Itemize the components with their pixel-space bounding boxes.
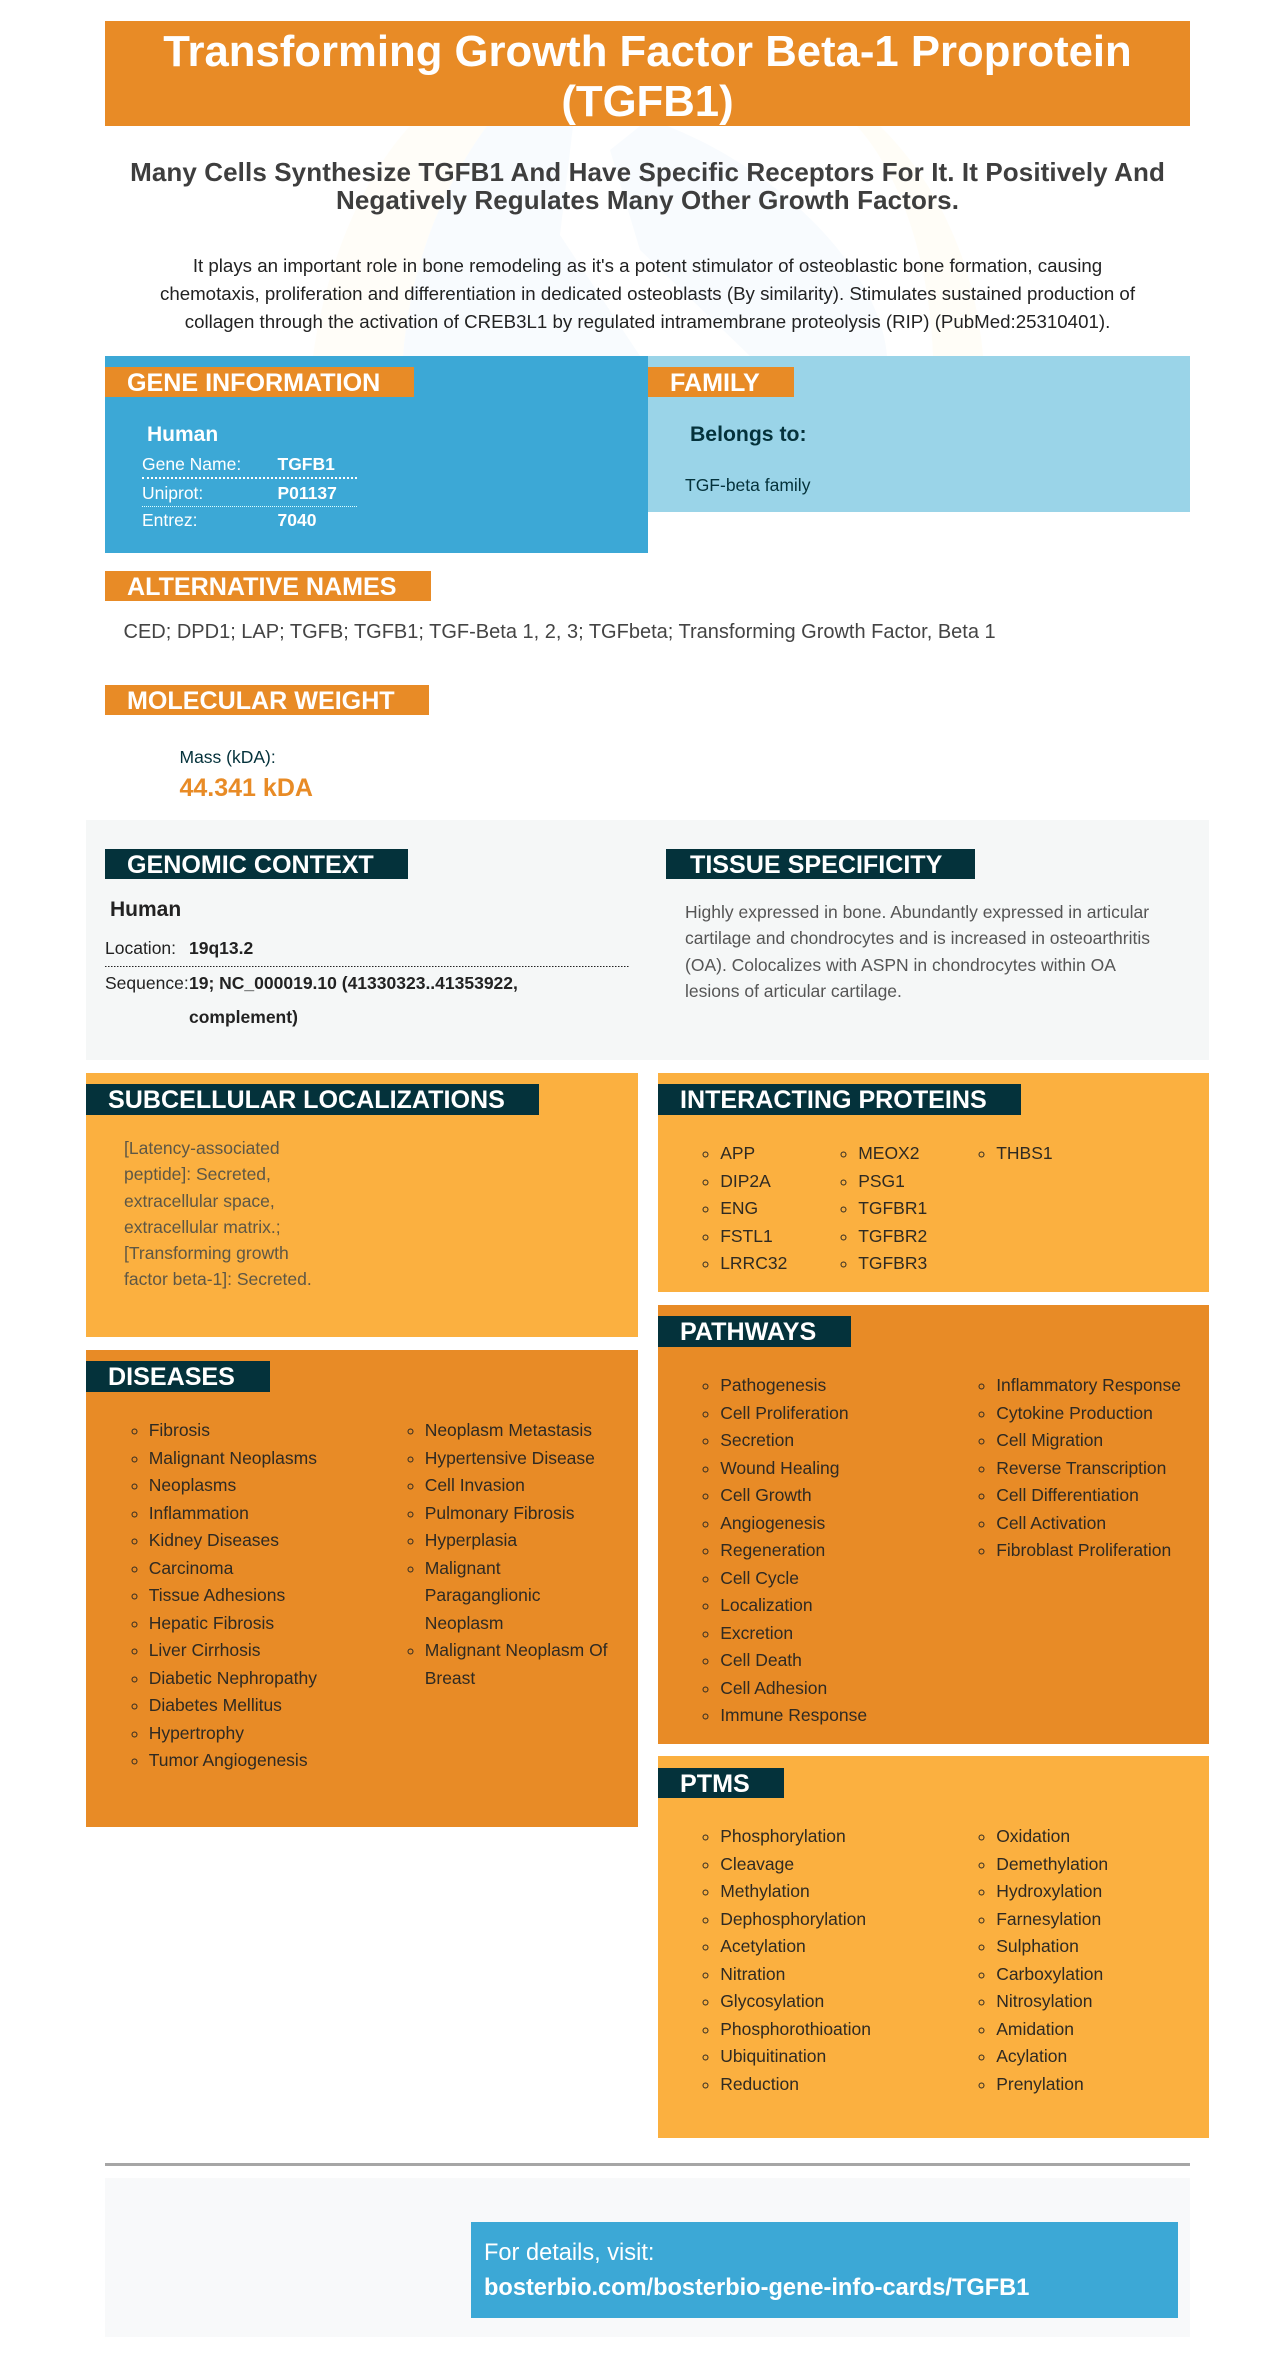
PTM list column 2: Nitrosylation bbox=[996, 1991, 1092, 2011]
uniprot row: P01137 bbox=[278, 483, 337, 503]
disease list column 1 bbox=[132, 1420, 317, 1770]
pathway list column 2: Fibroblast Proliferation bbox=[996, 1540, 1171, 1560]
heading: family bbox=[648, 367, 794, 397]
disease list column 1: Liver Cirrhosis bbox=[149, 1640, 261, 1660]
panel: pathways bbox=[658, 1305, 1209, 1744]
heading: pathways bbox=[658, 1316, 851, 1347]
pathway list column 1: Cell Proliferation bbox=[720, 1402, 849, 1422]
tissue specificity text: (OA). Colocalizes with ASPN in chondrocytes within OA bbox=[685, 955, 1116, 975]
disease list column 2: Malignant Neoplasm Of Breast bbox=[425, 1640, 608, 1688]
disease list column 1: Kidney Diseases bbox=[149, 1530, 279, 1550]
protein list column 1: FSTL1 bbox=[720, 1226, 773, 1246]
pathway list column 1: Angiogenesis bbox=[720, 1512, 825, 1532]
heading: PTMs: PTMS bbox=[680, 1770, 750, 1798]
subcellular text: extracellular space, bbox=[124, 1191, 275, 1211]
tissue specificity text: cartilage and chondrocytes and is increased in osteoarthritis bbox=[685, 928, 1150, 948]
protein list column 1: APP bbox=[720, 1143, 755, 1163]
subcellular text: [Transforming growth bbox=[124, 1243, 289, 1263]
heading: genomic context: GENOMIC CONTEXT bbox=[127, 851, 374, 879]
PTM list column 2: Acylation bbox=[996, 2046, 1067, 2066]
pathway list column 2: Cell Differentiation bbox=[996, 1485, 1139, 1505]
tissue specificity text bbox=[685, 902, 1150, 1001]
PTM list column 1 bbox=[702, 1826, 871, 2094]
mass value: 44.341 kDA bbox=[180, 774, 313, 802]
pathway list column 2: Inflammatory Response bbox=[996, 1375, 1181, 1395]
uniprot row: Uniprot: bbox=[142, 483, 203, 503]
protein list column 2: MEOX2 bbox=[858, 1143, 919, 1163]
species label: Human bbox=[147, 423, 218, 446]
PTM list column 2: Demethylation bbox=[996, 1854, 1108, 1874]
subcellular text: peptide]: Secreted, bbox=[124, 1164, 271, 1184]
disease list column 1: Hepatic Fibrosis bbox=[149, 1612, 274, 1632]
disease list column 1: Neoplasms bbox=[149, 1475, 236, 1495]
subtitle: Negatively Regulates Many Other Growth Factors. bbox=[336, 185, 959, 215]
pathway list column 1: Cell Death bbox=[720, 1650, 802, 1670]
pathway list column 1: Wound Healing bbox=[720, 1458, 840, 1478]
entrez row: 7040 bbox=[278, 510, 316, 530]
subtitle: Many Cells Synthesize TGFB1 And Have Specific Receptors For It. It Positively And bbox=[130, 157, 1165, 187]
disease list column 1: Tumor Angiogenesis bbox=[149, 1750, 308, 1770]
panel: footer bbox=[105, 2178, 1190, 2337]
belongs to label: Belongs to: bbox=[690, 423, 807, 446]
pathway list column 2: Reverse Transcription bbox=[996, 1458, 1166, 1478]
disease list column 1: Fibrosis bbox=[149, 1420, 210, 1440]
heading: subcellular localizations: SUBCELLULAR LOCALIZATIONS bbox=[108, 1086, 505, 1114]
panel: family bbox=[648, 356, 1190, 512]
panel: interacting proteins bbox=[658, 1073, 1209, 1292]
disease list column 1: Hypertrophy bbox=[149, 1722, 244, 1742]
disease list column 1: Carcinoma bbox=[149, 1558, 233, 1578]
pathway list column 1: Cell Adhesion bbox=[720, 1678, 827, 1698]
pathway list column 1: Localization bbox=[720, 1595, 813, 1615]
pathway list column 1: Immune Response bbox=[720, 1705, 867, 1725]
description paragraph: chemotaxis, proliferation and differentiation in dedicated osteoblasts (By similarity). Stimulates sustained production of bbox=[160, 283, 1135, 304]
PTM list column 2: Amidation bbox=[996, 2018, 1074, 2038]
pathway list column 2: Cell Activation bbox=[996, 1512, 1106, 1532]
panel: subcellular localizations bbox=[86, 1073, 638, 1337]
sequence row bbox=[105, 973, 518, 1027]
disease list column 2 bbox=[408, 1420, 608, 1688]
tissue specificity text: Highly expressed in bone. Abundantly expressed in articular bbox=[685, 902, 1149, 922]
sequence row: 19; NC_000019.10 (41330323..41353922, bbox=[189, 973, 518, 993]
disease list column 1: Tissue Adhesions bbox=[149, 1585, 285, 1605]
protein list column 3: THBS1 bbox=[996, 1143, 1053, 1163]
PTM list column 2: Farnesylation bbox=[996, 1908, 1101, 1928]
PTM list column 1: Phosphorylation bbox=[720, 1826, 846, 1846]
disease list column 1: Diabetic Nephropathy bbox=[149, 1668, 317, 1688]
disease list column 1: Inflammation bbox=[149, 1502, 249, 1522]
heading: PTMs bbox=[658, 1768, 784, 1798]
PTM list column 1: Reduction bbox=[720, 2074, 799, 2094]
subcellular text: factor beta-1]: Secreted. bbox=[124, 1269, 312, 1289]
pathway list column 2 bbox=[978, 1375, 1181, 1560]
PTM list column 1: Phosphorothioation bbox=[720, 2018, 871, 2038]
gene name row: TGFB1 bbox=[278, 454, 335, 474]
callout label: For details, visit: bbox=[484, 2240, 654, 2266]
description paragraph bbox=[160, 255, 1136, 332]
protein list column 2: TGFBR2 bbox=[858, 1226, 927, 1246]
subcellular text: extracellular matrix.; bbox=[124, 1217, 281, 1237]
subcellular text: [Latency-associated bbox=[124, 1138, 280, 1158]
disease list column 2: Hyperplasia bbox=[425, 1530, 517, 1550]
panel: genomic context and tissue specificity bbox=[86, 820, 1209, 1060]
PTM list column 1: Methylation bbox=[720, 1881, 810, 1901]
background watermark bbox=[300, 126, 1000, 356]
location row: Location: bbox=[105, 938, 176, 958]
protein list column 2: TGFBR3 bbox=[858, 1253, 927, 1273]
title banner bbox=[105, 21, 1190, 126]
location row: 19q13.2 bbox=[189, 938, 253, 958]
protein list column 1: LRRC32 bbox=[720, 1253, 787, 1273]
pathway list column 1: Cell Growth bbox=[720, 1485, 812, 1505]
entrez row: Entrez: bbox=[142, 510, 197, 530]
family value: TGF-beta family bbox=[685, 474, 810, 494]
disease list column 1: Malignant Neoplasms bbox=[149, 1448, 317, 1468]
pathway list column 1: Cell Cycle bbox=[720, 1568, 799, 1588]
pathway list column 1: Pathogenesis bbox=[720, 1375, 826, 1395]
heading: diseases: DISEASES bbox=[108, 1363, 235, 1391]
protein list column 2: PSG1 bbox=[858, 1170, 905, 1190]
protein list column 2: TGFBR1 bbox=[858, 1198, 927, 1218]
PTM list column 1: Dephosphorylation bbox=[720, 1908, 866, 1928]
uniprot row bbox=[142, 483, 357, 507]
title banner: Transforming Growth Factor Beta-1 Proprotein bbox=[163, 27, 1132, 76]
panel: diseases bbox=[86, 1350, 638, 1827]
heading: alternative names: ALTERNATIVE NAMES bbox=[127, 573, 397, 601]
pathway list column 1 bbox=[702, 1375, 867, 1725]
pathway list column 1: Regeneration bbox=[720, 1540, 825, 1560]
gene name row: Gene Name: bbox=[142, 454, 241, 474]
heading: family: FAMILY bbox=[670, 369, 760, 397]
tissue specificity text: lesions of articular cartilage. bbox=[685, 981, 902, 1001]
mass label: Mass (kDA): bbox=[180, 747, 276, 767]
protein list column 2 bbox=[840, 1143, 927, 1273]
PTM list column 2: Prenylation bbox=[996, 2074, 1084, 2094]
description paragraph: collagen through the activation of CREB3L1 by regulated intramembrane proteolysis (RIP) (PubMed:25310401). bbox=[185, 311, 1110, 332]
protein list column 1: ENG bbox=[720, 1198, 758, 1218]
disease list column 2: Hypertensive Disease bbox=[425, 1448, 595, 1468]
disease list column 2: Malignant Paraganglionic Neoplasm bbox=[425, 1558, 540, 1632]
PTM list column 1: Acetylation bbox=[720, 1936, 806, 1956]
pathway list column 1: Excretion bbox=[720, 1622, 793, 1642]
entrez row bbox=[142, 510, 316, 530]
callout: details link bbox=[471, 2222, 1178, 2318]
heading: molecular weight: MOLECULAR WEIGHT bbox=[127, 687, 395, 715]
PTM list column 1: Glycosylation bbox=[720, 1991, 824, 2011]
sequence row: complement) bbox=[189, 1007, 298, 1027]
protein list column 1 bbox=[702, 1143, 787, 1273]
alternative names text: CED; DPD1; LAP; TGFB; TGFB1; TGF-Beta 1, 2, 3; TGFbeta; Transforming Growth Factor, Beta 1 bbox=[124, 621, 996, 643]
heading: interacting proteins: INTERACTING PROTEINS bbox=[680, 1086, 987, 1114]
disease list column 2: Cell Invasion bbox=[425, 1475, 525, 1495]
disease list column 2: Pulmonary Fibrosis bbox=[425, 1502, 574, 1522]
PTM list column 2: Carboxylation bbox=[996, 1964, 1103, 1984]
PTM list column 2: Hydroxylation bbox=[996, 1881, 1102, 1901]
PTM list column 2: Oxidation bbox=[996, 1826, 1070, 1846]
panel: gene information bbox=[105, 356, 648, 553]
heading: pathways: PATHWAYS bbox=[680, 1318, 816, 1346]
protein list column 1: DIP2A bbox=[720, 1170, 771, 1190]
heading: gene information: GENE INFORMATION bbox=[127, 369, 380, 397]
sequence row: Sequence: bbox=[105, 973, 189, 993]
subcellular text bbox=[124, 1138, 312, 1289]
gene name row bbox=[142, 455, 357, 479]
callout url: bosterbio.com/bosterbio-gene-info-cards/TGFB1 bbox=[484, 2275, 1029, 2301]
subtitle bbox=[130, 157, 1165, 215]
location row bbox=[105, 936, 630, 967]
panel: PTMs bbox=[658, 1756, 1209, 2138]
disease list column 1: Diabetes Mellitus bbox=[149, 1695, 282, 1715]
PTM list column 2: Sulphation bbox=[996, 1936, 1079, 1956]
PTM list column 1: Nitration bbox=[720, 1964, 785, 1984]
heading: diseases bbox=[86, 1361, 270, 1392]
pathway list column 2: Cytokine Production bbox=[996, 1402, 1153, 1422]
PTM list column 1: Ubiquitination bbox=[720, 2046, 826, 2066]
disease list column 2: Neoplasm Metastasis bbox=[425, 1420, 592, 1440]
PTM list column 1: Cleavage bbox=[720, 1854, 794, 1874]
pathway list column 1: Secretion bbox=[720, 1430, 794, 1450]
species label: Human bbox=[110, 898, 181, 921]
pathway list column 2: Cell Migration bbox=[996, 1430, 1103, 1450]
PTM list column 2 bbox=[978, 1826, 1108, 2094]
heading: tissue specificity: TISSUE SPECIFICITY bbox=[690, 851, 942, 879]
title banner: (TGFB1) bbox=[561, 77, 734, 126]
description paragraph: It plays an important role in bone remodeling as it's a potent stimulator of osteoblastic bone formation, causing bbox=[193, 255, 1102, 276]
